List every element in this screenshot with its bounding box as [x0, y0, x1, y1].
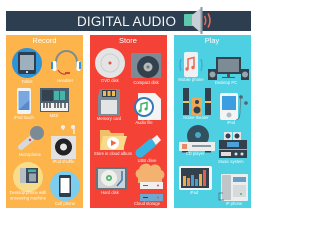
icon: DVD disc [95, 48, 125, 78]
icon: microphone [21, 126, 44, 147]
icon: home theater [183, 88, 211, 115]
label: desktop phone: Desktop phone with [10, 190, 47, 195]
icon: tablet [12, 48, 42, 78]
panel: record: answering machine [10, 196, 47, 200]
icon: CD player [179, 125, 215, 152]
icon: cloud storage [136, 164, 164, 201]
label: memory card: Memory card [97, 116, 122, 121]
heading: play: Play [205, 36, 220, 45]
icon: memory card [98, 89, 120, 116]
label: iPad: iPad [190, 190, 199, 195]
icon: compact disc [131, 53, 161, 78]
label: IP phone: IP phone [226, 201, 243, 206]
label: hard drive: Hard disk [101, 190, 120, 195]
panel: store [90, 35, 167, 208]
icon: USB drive [140, 135, 161, 153]
label: cloud storage: Cloud storage [134, 201, 161, 206]
label: USB drive: USB drive [138, 158, 157, 163]
label: MIDI: MIDI [50, 113, 58, 118]
label: desktop PC: Desktop PC [215, 80, 237, 85]
label: home theater: Home theater [183, 115, 209, 120]
icon: IP phone [219, 174, 248, 201]
label: iPod shuffle: iPod shuffle [53, 159, 75, 164]
label: mobile phone: Mobile phone [178, 77, 204, 82]
panel: record [6, 35, 83, 208]
label: CD player: CD player [186, 151, 205, 156]
label: audio file: Audio file [135, 120, 153, 125]
panel: play [174, 35, 251, 208]
label: compact disc: Compact disk [133, 80, 160, 85]
icon: speaker [184, 7, 210, 34]
icon: iPod shuffle [51, 125, 76, 159]
icon: MIDI keyboard [40, 88, 69, 112]
label: iPod: iPod [227, 120, 236, 125]
label: iPod touch: iPod touch [14, 115, 35, 120]
icon: iPad [179, 166, 212, 190]
label: tablet: Tablet [21, 79, 33, 84]
label: headset: Headset [57, 78, 74, 83]
title: DIGITAL AUDIO [77, 14, 176, 29]
icon: headset [51, 51, 81, 74]
icon: cell phone [50, 171, 80, 201]
label: folder: Store in cloud album [94, 151, 133, 156]
icon: desktop PC [208, 57, 249, 80]
icon: audio file [134, 93, 161, 120]
icon: hard drive [96, 167, 127, 190]
label: microphone: Microphone [19, 152, 42, 157]
icon: iPod touch [17, 88, 31, 114]
label: cell phone: Cell phone [55, 201, 76, 206]
heading: record: Record [32, 36, 57, 45]
label: music system: Music system [218, 159, 244, 164]
icon: mobile phone [180, 52, 202, 77]
header bar [6, 7, 251, 34]
icon: folder [100, 130, 127, 150]
icon: desktop phone [13, 162, 43, 192]
label: DVD disc: DVD disk [101, 78, 120, 83]
icon: iPod [220, 93, 248, 120]
heading: store: Store [119, 36, 137, 45]
icon: music system [219, 132, 247, 158]
